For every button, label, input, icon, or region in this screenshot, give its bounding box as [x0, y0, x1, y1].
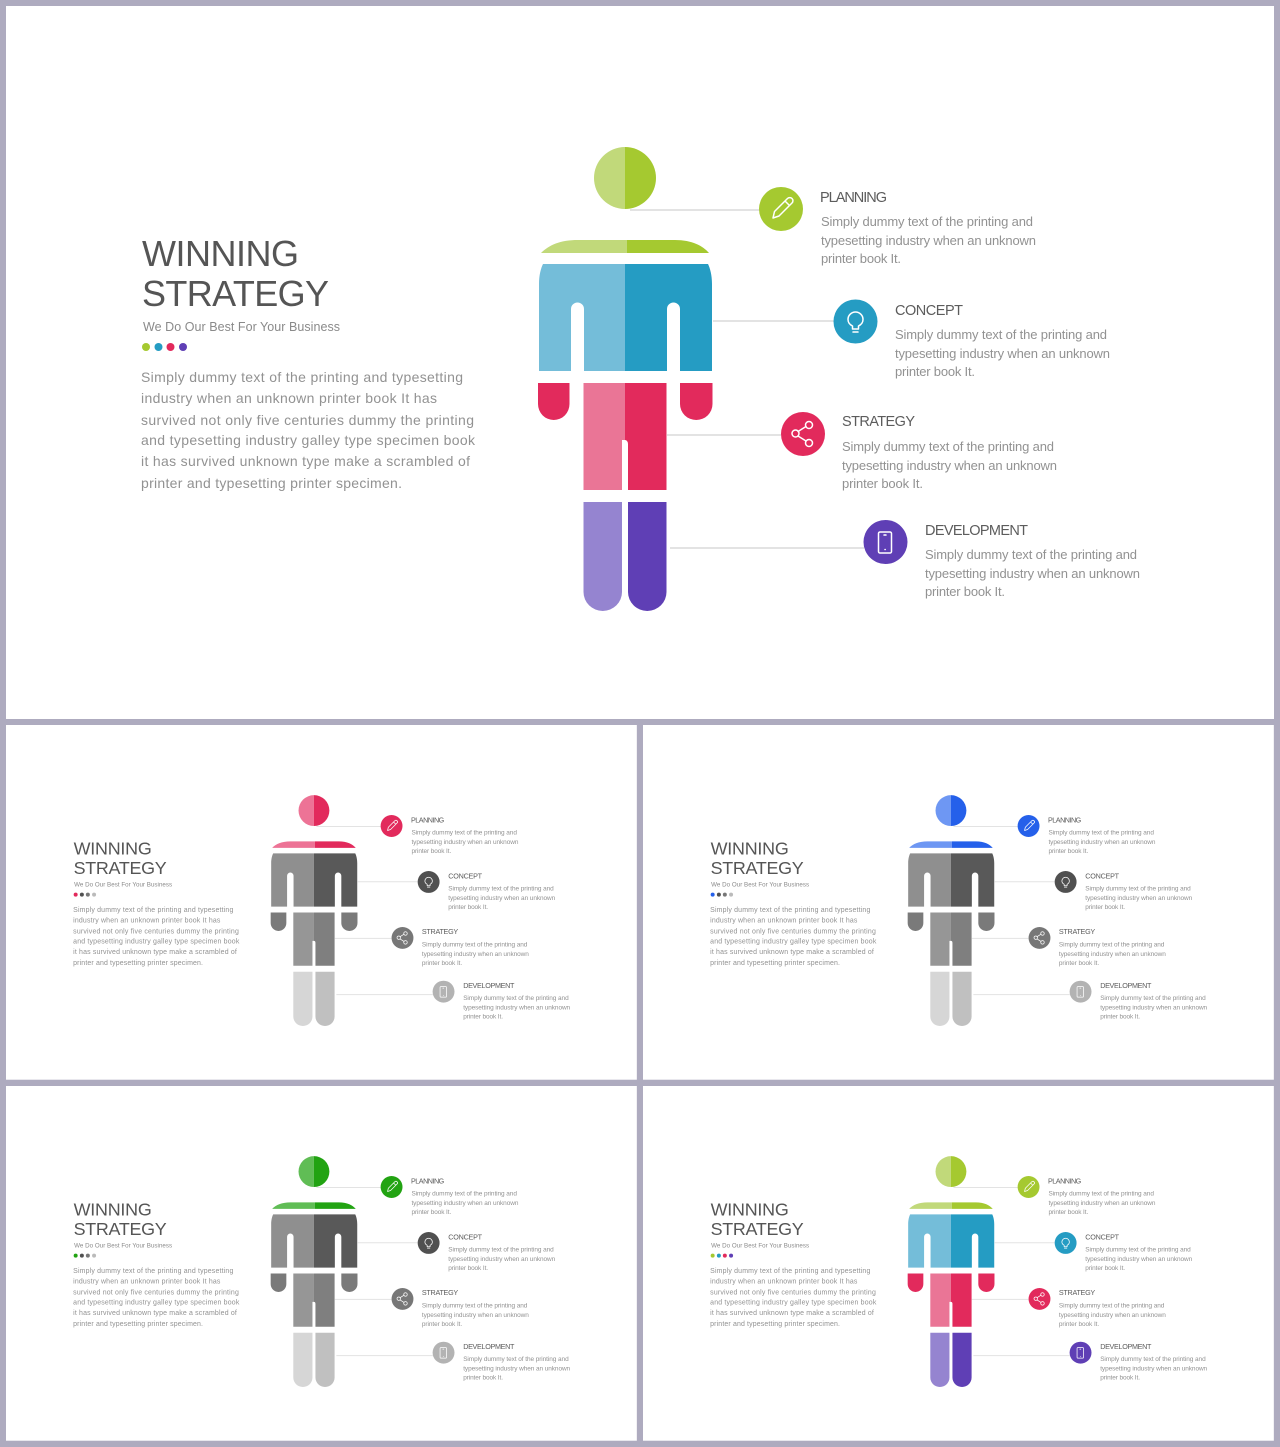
development text: Simply dummy text of the printing and [463, 1356, 569, 1363]
body paragraph: printer and typesetting printer specimen. [710, 960, 840, 967]
concept text: typesetting industry when an unknown [1085, 895, 1193, 902]
body paragraph [73, 907, 240, 967]
body paragraph: and typesetting industry galley type specimen book [141, 432, 476, 448]
strategy text: typesetting industry when an unknown [422, 951, 529, 958]
development text: DEVELOPMENT [463, 981, 515, 990]
human figure [271, 1156, 357, 1387]
panel: main slide, colour version [6, 6, 1274, 719]
strategy text [842, 414, 1057, 491]
strategy text: printer book It. [842, 476, 923, 491]
subtitle: We Do Our Best For Your Business [711, 882, 809, 889]
development text: typesetting industry when an unknown [925, 566, 1140, 581]
strategy text: typesetting industry when an unknown [1059, 951, 1166, 958]
development text [925, 523, 1140, 599]
hips [584, 383, 666, 490]
title [74, 1199, 167, 1239]
planning text [1048, 816, 1156, 855]
title: STRATEGY [142, 273, 329, 314]
icon: pencil [759, 187, 803, 231]
head [299, 1156, 329, 1187]
strategy text: printer book It. [422, 1321, 462, 1328]
strategy text: Simply dummy text of the printing and [422, 1302, 528, 1309]
planning text: PLANNING [820, 190, 887, 206]
body paragraph: Simply dummy text of the printing and typesetting [141, 369, 463, 385]
subtitle: We Do Our Best For Your Business [143, 320, 340, 334]
planning text [1048, 1177, 1156, 1216]
concept text: Simply dummy text of the printing and [895, 327, 1107, 342]
development text: DEVELOPMENT [463, 1342, 515, 1351]
icon: phone [433, 981, 454, 1003]
body paragraph: printer and typesetting printer specimen. [141, 475, 402, 491]
strategy text: STRATEGY [842, 414, 915, 430]
colour dots [711, 1254, 733, 1258]
icon: pencil [381, 1176, 403, 1198]
body paragraph: it has survived unknown type make a scrambled of [73, 1310, 237, 1317]
body paragraph: Simply dummy text of the printing and typesetting [73, 907, 233, 914]
body paragraph: it has survived unknown type make a scrambled of [710, 1310, 874, 1317]
planning text: printer book It. [411, 848, 451, 855]
connector lines [953, 826, 1070, 995]
planning text: PLANNING [411, 1177, 445, 1186]
concept text: Simply dummy text of the printing and [1085, 1247, 1191, 1254]
hands [908, 913, 994, 931]
torso and arms [271, 1214, 357, 1268]
strategy text: Simply dummy text of the printing and [1059, 1302, 1165, 1309]
colour dots [142, 343, 187, 351]
body paragraph: and typesetting industry galley type specimen book [710, 1299, 877, 1306]
hips [293, 913, 335, 966]
planning text: typesetting industry when an unknown [1048, 1200, 1156, 1207]
title: WINNING [74, 1199, 152, 1219]
body paragraph: it has survived unknown type make a scrambled of [73, 949, 237, 956]
subtitle: We Do Our Best For Your Business [74, 882, 172, 889]
icon: share [1029, 1288, 1050, 1310]
torso and arms [908, 853, 994, 907]
planning text: printer book It. [411, 1209, 451, 1216]
body paragraph [710, 907, 877, 967]
icon: pencil [381, 815, 403, 837]
concept text: printer book It. [1085, 1265, 1125, 1272]
concept text: printer book It. [895, 364, 975, 379]
body paragraph: industry when an unknown printer book It has [73, 918, 221, 925]
hands [908, 1274, 994, 1292]
strategy text: typesetting industry when an unknown [842, 458, 1057, 473]
concept text: typesetting industry when an unknown [448, 1256, 556, 1263]
body paragraph: Simply dummy text of the printing and typesetting [73, 1268, 233, 1275]
colour dots [74, 893, 96, 897]
torso and arms [539, 264, 712, 371]
planning text: PLANNING [1048, 816, 1082, 825]
development text: typesetting industry when an unknown [1100, 1005, 1208, 1012]
development text: printer book It. [925, 584, 1005, 599]
concept text: typesetting industry when an unknown [448, 895, 556, 902]
icon: phone [1070, 981, 1091, 1003]
development text: printer book It. [463, 1014, 503, 1021]
body paragraph: survived not only five centuries dummy the printing [710, 928, 876, 935]
hips [930, 1274, 972, 1327]
title: WINNING [74, 838, 152, 858]
human figure [908, 1156, 994, 1387]
body paragraph [710, 1268, 877, 1328]
body paragraph: industry when an unknown printer book It has [710, 918, 858, 925]
concept text [1085, 1233, 1193, 1272]
panel: full colour small slide [643, 1086, 1274, 1441]
concept text [895, 303, 1110, 379]
body paragraph: and typesetting industry galley type specimen book [73, 938, 240, 945]
body paragraph [141, 369, 476, 491]
collar [272, 1202, 356, 1209]
planning text: printer book It. [1048, 1209, 1088, 1216]
panel: pink accent slide [6, 725, 637, 1080]
body paragraph: survived not only five centuries dummy the printing [710, 1289, 876, 1296]
human figure [908, 795, 994, 1026]
concept text: printer book It. [1085, 904, 1125, 911]
planning text: Simply dummy text of the printing and [1048, 1190, 1154, 1197]
icon: light bulb [834, 300, 878, 344]
title: STRATEGY [711, 858, 804, 878]
body paragraph: survived not only five centuries dummy the printing [73, 1289, 239, 1296]
collar [909, 1202, 993, 1209]
planning text: typesetting industry when an unknown [411, 839, 519, 846]
colour dots [74, 1254, 96, 1258]
colour dots [711, 893, 733, 897]
hands [271, 913, 357, 931]
concept text: CONCEPT [448, 872, 483, 881]
hips [293, 1274, 335, 1327]
planning text: typesetting industry when an unknown [821, 233, 1036, 248]
title [711, 1199, 804, 1239]
icon: phone [433, 1342, 454, 1364]
icon: share [392, 1288, 413, 1310]
panel: green accent slide [6, 1086, 637, 1441]
head [594, 147, 656, 209]
strategy text: printer book It. [1059, 960, 1099, 967]
concept text: Simply dummy text of the printing and [1085, 886, 1191, 893]
strategy text: STRATEGY [1059, 1288, 1095, 1297]
body paragraph: industry when an unknown printer book It has [141, 390, 437, 406]
strategy text: STRATEGY [422, 1288, 458, 1297]
subtitle: We Do Our Best For Your Business [74, 1243, 172, 1250]
connector lines [316, 826, 433, 995]
icon: share [1029, 927, 1050, 949]
connector lines [953, 1187, 1070, 1356]
body paragraph: and typesetting industry galley type specimen book [73, 1299, 240, 1306]
planning text: Simply dummy text of the printing and [821, 214, 1033, 229]
strategy text: typesetting industry when an unknown [1059, 1312, 1166, 1319]
icon: light bulb [418, 1232, 440, 1254]
icon: light bulb [418, 871, 440, 893]
concept text [448, 1233, 556, 1272]
title: STRATEGY [711, 1219, 804, 1239]
title [711, 838, 804, 878]
body paragraph: industry when an unknown printer book It has [73, 1279, 221, 1286]
body paragraph: printer and typesetting printer specimen. [73, 960, 203, 967]
icon: phone [1070, 1342, 1091, 1364]
development text: printer book It. [1100, 1375, 1140, 1382]
legs [930, 1333, 972, 1387]
body paragraph: printer and typesetting printer specimen. [710, 1321, 840, 1328]
concept text: CONCEPT [1085, 872, 1120, 881]
strategy text: printer book It. [422, 960, 462, 967]
development text [463, 1342, 571, 1382]
torso and arms [271, 853, 357, 907]
planning text: PLANNING [411, 816, 445, 825]
collar [909, 841, 993, 848]
strategy text [1059, 1288, 1166, 1328]
legs [293, 1333, 335, 1387]
body paragraph: and typesetting industry galley type specimen book [710, 938, 877, 945]
hands [271, 1274, 357, 1292]
body paragraph: it has survived unknown type make a scrambled of [710, 949, 874, 956]
title: WINNING [711, 838, 789, 858]
development text: Simply dummy text of the printing and [1100, 1356, 1206, 1363]
strategy text: Simply dummy text of the printing and [842, 439, 1054, 454]
hands [538, 383, 712, 420]
human figure [538, 147, 712, 611]
development text: printer book It. [463, 1375, 503, 1382]
planning text [411, 1177, 519, 1216]
title: STRATEGY [74, 858, 167, 878]
development text: Simply dummy text of the printing and [463, 995, 569, 1002]
strategy text [422, 1288, 529, 1328]
icon: light bulb [1055, 1232, 1077, 1254]
planning text [820, 190, 1036, 266]
icon: pencil [1018, 1176, 1040, 1198]
legs [293, 972, 335, 1026]
development text [1100, 1342, 1208, 1382]
title [142, 233, 329, 314]
connector lines [630, 210, 864, 548]
torso and arms [908, 1214, 994, 1268]
development text: Simply dummy text of the printing and [925, 547, 1137, 562]
icon: share [392, 927, 413, 949]
concept text: printer book It. [448, 1265, 488, 1272]
development text: DEVELOPMENT [925, 523, 1028, 539]
planning text: Simply dummy text of the printing and [1048, 829, 1154, 836]
development text: DEVELOPMENT [1100, 981, 1152, 990]
concept text [1085, 872, 1193, 911]
icon: pencil [1018, 815, 1040, 837]
strategy text: Simply dummy text of the printing and [422, 941, 528, 948]
strategy text: STRATEGY [1059, 927, 1095, 936]
concept text: typesetting industry when an unknown [1085, 1256, 1193, 1263]
head [936, 1156, 966, 1187]
development text: typesetting industry when an unknown [463, 1366, 571, 1373]
development text [463, 981, 571, 1021]
collar [541, 240, 709, 253]
planning text: PLANNING [1048, 1177, 1082, 1186]
concept text: CONCEPT [1085, 1233, 1120, 1242]
human figure [271, 795, 357, 1026]
concept text: Simply dummy text of the printing and [448, 1247, 554, 1254]
concept text: CONCEPT [895, 303, 963, 319]
development text: Simply dummy text of the printing and [1100, 995, 1206, 1002]
icon: light bulb [1055, 871, 1077, 893]
head [936, 795, 966, 826]
development text [1100, 981, 1208, 1021]
planning text: printer book It. [821, 251, 901, 266]
planning text: typesetting industry when an unknown [1048, 839, 1156, 846]
body paragraph: it has survived unknown type make a scrambled of [141, 453, 470, 469]
development text: printer book It. [1100, 1014, 1140, 1021]
concept text [448, 872, 556, 911]
title: WINNING [711, 1199, 789, 1219]
development text: typesetting industry when an unknown [463, 1005, 571, 1012]
planning text: Simply dummy text of the printing and [411, 1190, 517, 1197]
planning text: printer book It. [1048, 848, 1088, 855]
panel: blue accent slide [643, 725, 1274, 1080]
connector lines [316, 1187, 433, 1356]
concept text: printer book It. [448, 904, 488, 911]
planning text [411, 816, 519, 855]
title: WINNING [142, 233, 299, 274]
hips [930, 913, 972, 966]
subtitle: We Do Our Best For Your Business [711, 1243, 809, 1250]
body paragraph: Simply dummy text of the printing and typesetting [710, 1268, 870, 1275]
body paragraph: printer and typesetting printer specimen. [73, 1321, 203, 1328]
strategy text: printer book It. [1059, 1321, 1099, 1328]
planning text: Simply dummy text of the printing and [411, 829, 517, 836]
icon: phone [864, 520, 908, 564]
collar [272, 841, 356, 848]
body paragraph: survived not only five centuries dummy the printing [141, 412, 474, 428]
head [299, 795, 329, 826]
strategy text: typesetting industry when an unknown [422, 1312, 529, 1319]
concept text: CONCEPT [448, 1233, 483, 1242]
development text: typesetting industry when an unknown [1100, 1366, 1208, 1373]
body paragraph: survived not only five centuries dummy the printing [73, 928, 239, 935]
body paragraph [73, 1268, 240, 1328]
legs [584, 502, 666, 611]
title [74, 838, 167, 878]
development text: DEVELOPMENT [1100, 1342, 1152, 1351]
strategy text: Simply dummy text of the printing and [1059, 941, 1165, 948]
strategy text [1059, 927, 1166, 967]
icon: share [781, 412, 825, 456]
planning text: typesetting industry when an unknown [411, 1200, 519, 1207]
legs [930, 972, 972, 1026]
title: STRATEGY [74, 1219, 167, 1239]
body paragraph: industry when an unknown printer book It has [710, 1279, 858, 1286]
body paragraph: Simply dummy text of the printing and typesetting [710, 907, 870, 914]
strategy text: STRATEGY [422, 927, 458, 936]
strategy text [422, 927, 529, 967]
concept text: typesetting industry when an unknown [895, 346, 1110, 361]
concept text: Simply dummy text of the printing and [448, 886, 554, 893]
